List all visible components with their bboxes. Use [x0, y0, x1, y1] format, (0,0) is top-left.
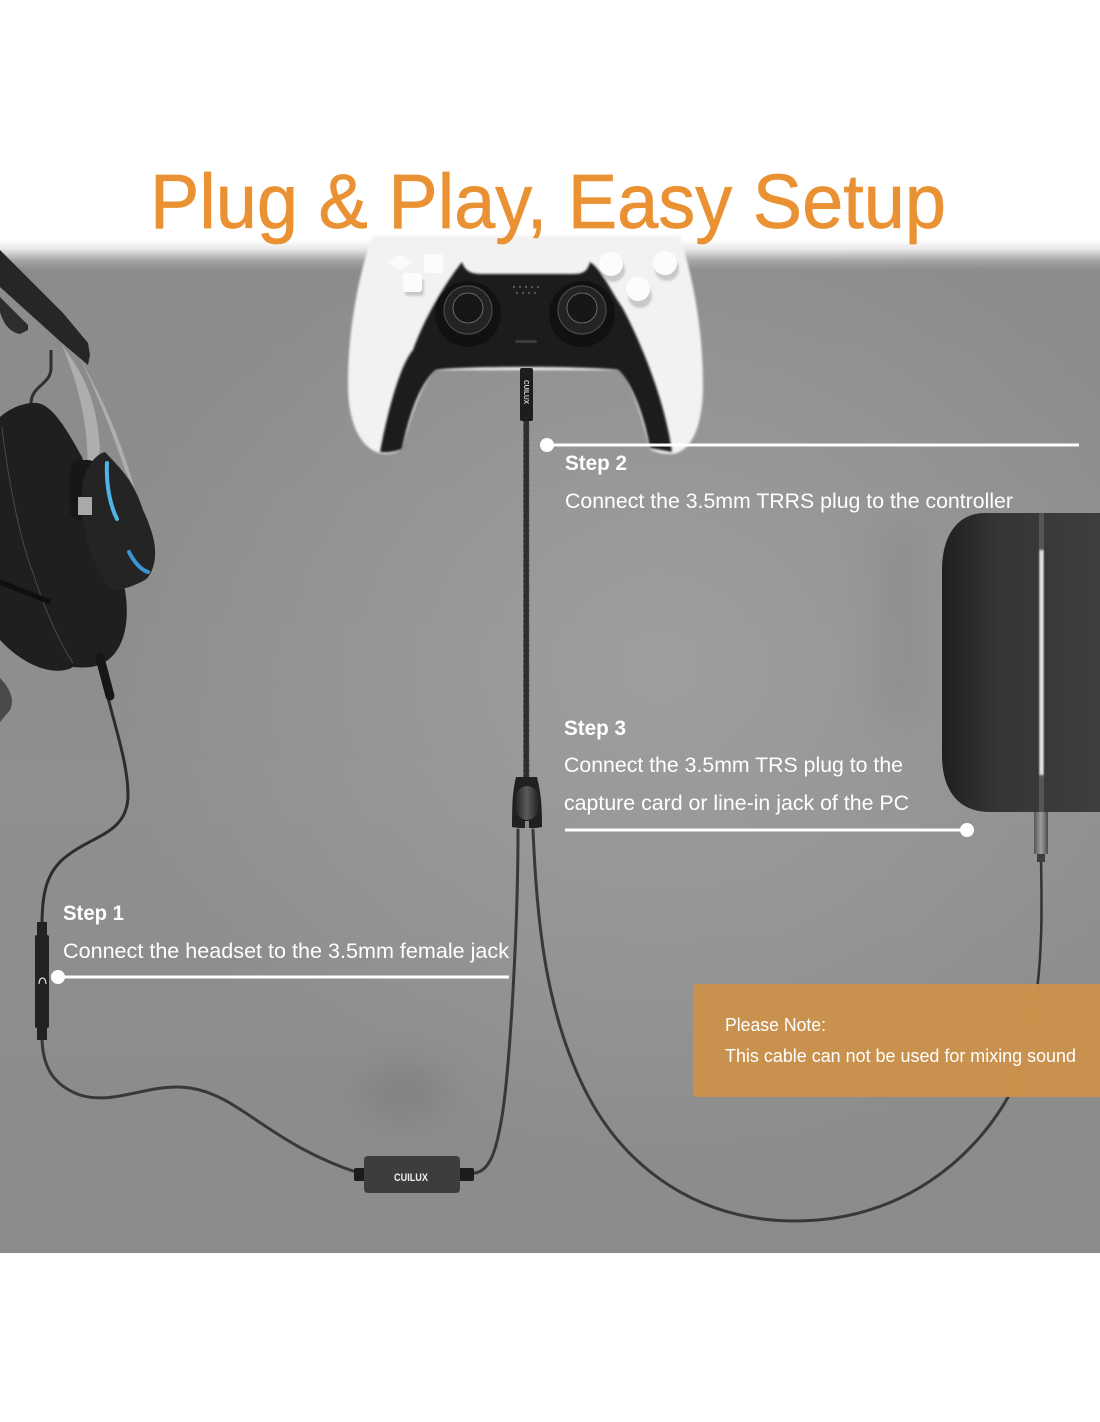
title: Plug & Play, Easy Setup	[150, 159, 946, 245]
capture card light strip	[1039, 513, 1044, 812]
capture card	[942, 513, 1100, 862]
step 1 body: Connect the headset to the 3.5mm female jack	[63, 939, 509, 963]
note body: This cable can not be used for mixing sound	[725, 1045, 1076, 1066]
note box	[693, 984, 1100, 1097]
headset headband	[0, 250, 90, 365]
step 2 body: Connect the 3.5mm TRRS plug to the controller	[565, 489, 1013, 513]
headset braided cable root	[100, 658, 110, 696]
female jack connector	[35, 922, 49, 1040]
controller black grip	[380, 262, 672, 452]
step 3 leader line	[565, 823, 974, 837]
headset blue light	[107, 463, 148, 572]
step 1 heading: Step 1	[63, 902, 124, 925]
step 1 callout	[51, 902, 509, 984]
step 3 callout	[564, 717, 974, 837]
bottom white area	[0, 1253, 1100, 1422]
step 3 heading: Step 3	[564, 717, 626, 740]
headset cable to splitter module	[42, 690, 1042, 1221]
headset stand	[0, 678, 12, 722]
step 1 leader line	[51, 970, 509, 984]
controller d-pad and face buttons	[386, 251, 677, 301]
controller thumbsticks	[435, 281, 615, 347]
headset hanger arm	[0, 297, 28, 334]
step 2 heading: Step 2	[565, 452, 627, 475]
headphone icon	[39, 978, 46, 984]
headset pad edge highlight	[2, 427, 73, 663]
TRRS plug and braided cable to controller: CUILUX	[522, 380, 529, 404]
step 3 body: Connect the 3.5mm TRS plug to the	[564, 753, 903, 777]
photo background	[0, 240, 1100, 1253]
controller speaker dots and mic slot	[513, 286, 539, 343]
headset silver pivot	[78, 497, 92, 515]
controller button shadows	[405, 257, 679, 308]
controller	[348, 236, 703, 454]
Y splitter	[512, 777, 542, 828]
capture card 3.5mm plug	[1034, 812, 1048, 862]
inline control module	[354, 1156, 474, 1193]
controller white shell	[348, 236, 703, 454]
note heading: Please Note:	[725, 1014, 826, 1035]
headset ear cup and pad	[0, 403, 127, 671]
headset silver yoke	[62, 345, 135, 500]
step 2 leader line	[540, 438, 1079, 452]
headset side disc	[81, 452, 155, 590]
inline control module: CUILUX	[394, 1172, 429, 1184]
headset strap	[0, 582, 50, 602]
TRRS plug and braided cable to controller	[520, 368, 533, 778]
headset hub	[70, 460, 98, 520]
headset	[0, 250, 155, 722]
step 2 callout	[540, 438, 1079, 513]
headset yoke wire	[31, 350, 51, 404]
step 3 body: capture card or line-in jack of the PC	[564, 791, 909, 815]
